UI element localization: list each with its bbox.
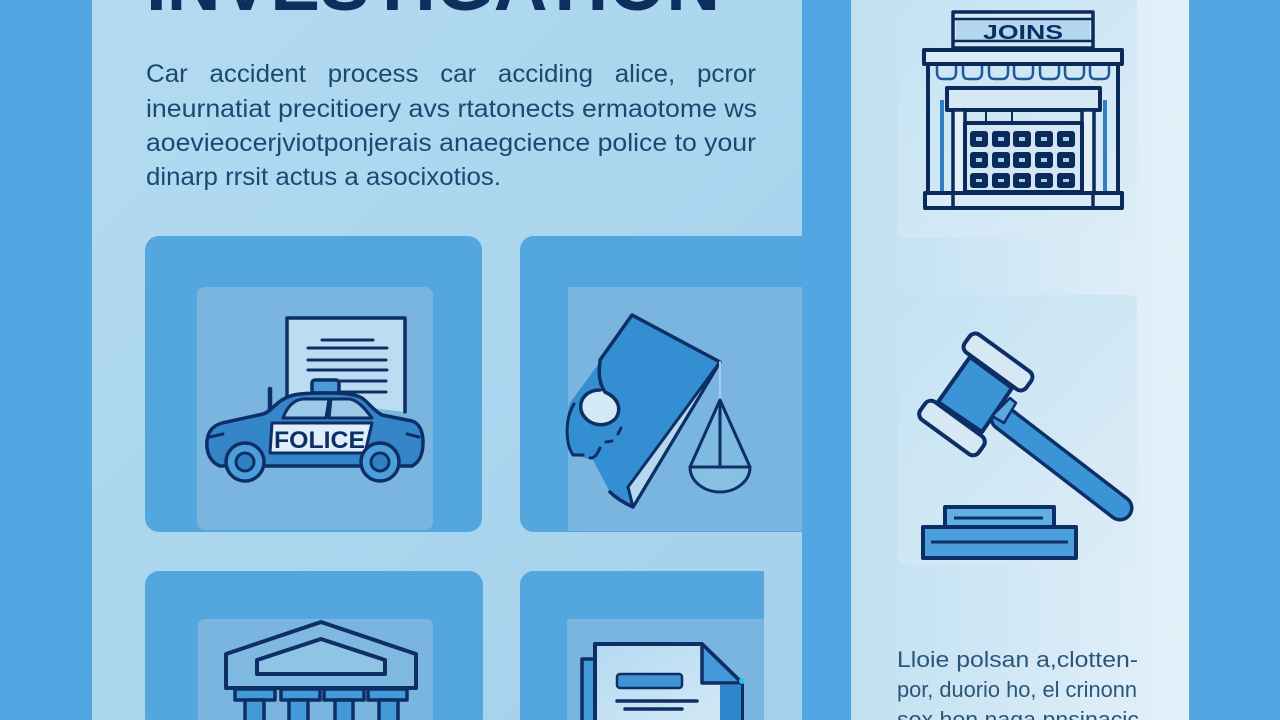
sidebar text block: Lloie polsan a,clotten- [897, 647, 1138, 672]
panel: main investigation panel [92, 0, 802, 720]
icon: police car with report [207, 318, 423, 481]
panel: court sidebar [851, 0, 1189, 720]
card: courthouse [145, 571, 483, 720]
icon: courthouse [226, 622, 416, 720]
card: police report [145, 236, 482, 532]
icon: book and scales [567, 315, 750, 507]
icon: document [582, 644, 745, 720]
card: law book and scales [520, 236, 802, 532]
sidebar text block [897, 647, 1139, 720]
card: legal document [520, 571, 764, 720]
sign label: JOINS [983, 22, 1063, 44]
intro text block: Car accident process car acciding alice, pcror [146, 60, 756, 88]
intro text block: aoevieocerjviotponjerais anaegcience police to your [146, 129, 756, 157]
icon: court building [924, 12, 1122, 208]
intro text block: dinarp rrsit actus a asocixotios. [146, 163, 501, 191]
intro text block [146, 60, 757, 191]
icon: gavel [916, 331, 1120, 558]
card: gavel [898, 295, 1137, 565]
card: court building [898, 0, 1137, 238]
intro text block: ineurnatiat precitioery avs rtatonects ermaotome ws [146, 95, 757, 123]
sidebar text block: por, duorio ho, el crinonn [897, 677, 1137, 702]
police label: FOLICE [274, 427, 365, 454]
